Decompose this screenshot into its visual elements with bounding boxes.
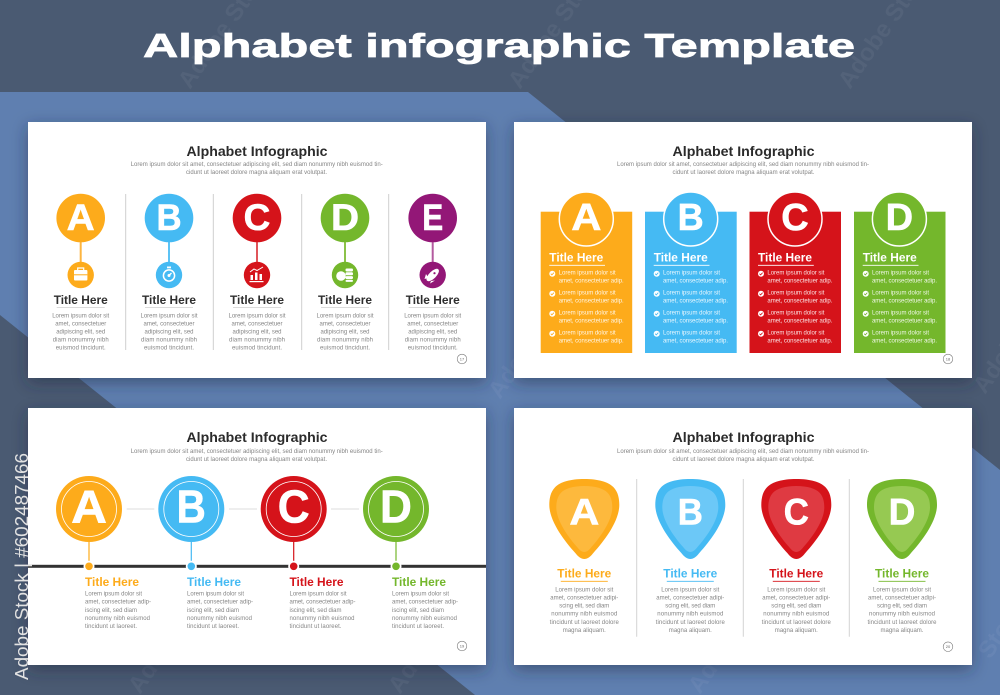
card D: Title Here	[863, 251, 917, 265]
page number 19	[457, 641, 467, 651]
column E: Title Here	[406, 293, 460, 307]
card B: Title Here	[654, 251, 708, 265]
card A: Lorem ipsum dolor sit	[559, 311, 616, 317]
page number 19: 19	[460, 644, 465, 648]
main title: Alphabet infographic Template	[143, 27, 855, 64]
card A: A	[571, 197, 601, 239]
node C: Lorem ipsum dolor sit	[290, 592, 347, 598]
column D: Title Here	[318, 293, 372, 307]
card D	[854, 192, 946, 353]
column D: amet, consectetuer	[320, 322, 370, 328]
column B: diam nonummy nibh	[141, 338, 197, 344]
column E: diam nonummy nibh	[405, 338, 461, 344]
panel intro text: Lorem ipsum dolor sit amet, consectetuer adipiscing elit, sed diam nonummy nibh euismod tin-	[131, 162, 383, 168]
card B: amet, consectetuer adip.	[663, 339, 728, 345]
shield A: magna aliquam.	[563, 628, 606, 634]
column B: Lorem ipsum dolor sit	[140, 314, 198, 320]
shield D: D	[889, 491, 915, 532]
card D: Lorem ipsum dolor sit	[872, 331, 929, 337]
card B: Lorem ipsum dolor sit	[663, 291, 720, 297]
shield B: Title Here	[663, 567, 718, 581]
column C: diam nonummy nibh	[229, 338, 285, 344]
column D: adipiscing elit, sed	[320, 330, 370, 336]
column D: Lorem ipsum dolor sit	[316, 314, 374, 320]
node C: iscing elit, sed diam	[290, 608, 342, 614]
node D: iscing elit, sed diam	[392, 608, 444, 614]
panel intro text	[617, 449, 869, 463]
shield B: scing elit, sed diam	[665, 604, 715, 610]
card D: amet, consectetuer adip.	[872, 339, 937, 345]
node A: iscing elit, sed diam	[85, 608, 137, 614]
node B: B	[177, 482, 206, 533]
panel heading: Alphabet Infographic	[672, 429, 815, 445]
shield A: amet, consectetuer adipi-	[550, 595, 618, 601]
panel intro text	[131, 449, 383, 463]
column A: Lorem ipsum dolor sit	[52, 314, 110, 320]
panel heading: Alphabet Infographic	[186, 143, 328, 159]
column E	[404, 194, 462, 352]
node B: nonummy nibh euismod	[187, 616, 252, 622]
column E: E	[422, 198, 443, 239]
column A: diam nonummy nibh	[53, 338, 109, 344]
card D: Lorem ipsum dolor sit	[872, 311, 929, 317]
panel intro text: Lorem ipsum dolor sit amet, consectetuer adipiscing elit, sed diam nonummy nibh euismod tin-	[617, 449, 869, 455]
card D: D	[886, 197, 913, 239]
node B: tincidunt ut laoreet.	[187, 624, 239, 630]
shield C: nonummy nibh euismod	[763, 612, 829, 618]
panel intro text: cidunt ut laoreet dolore magna aliquam erat volutpat.	[672, 170, 815, 176]
shield B: amet, consectetuer adipi-	[656, 595, 724, 601]
shield C: Lorem ipsum dolor sit	[767, 587, 826, 593]
page number 18: 18	[946, 356, 951, 362]
panel intro text	[131, 162, 383, 176]
panel intro text: Lorem ipsum dolor sit amet, consectetuer adipiscing elit, sed diam nonummy nibh euismod tin-	[131, 449, 383, 455]
shield D: nonummy nibh euismod	[869, 612, 935, 618]
node C: amet, consectetuer adip-	[290, 600, 356, 606]
card D: amet, consectetuer adip.	[872, 299, 937, 305]
shield C: scing elit, sed diam	[771, 604, 821, 610]
shield B: B	[678, 491, 703, 533]
panel: guitar pick shields	[514, 408, 972, 665]
shield A	[549, 479, 619, 634]
node D: Title Here	[392, 575, 446, 589]
card D: Lorem ipsum dolor sit	[872, 271, 929, 277]
shield A: Title Here	[557, 567, 612, 581]
card A: Lorem ipsum dolor sit	[559, 271, 616, 277]
node D	[363, 476, 458, 630]
column C: amet, consectetuer	[232, 322, 282, 328]
shield D: Lorem ipsum dolor sit	[873, 587, 931, 593]
shield A: tincidunt ut laoreet dolore	[550, 620, 619, 626]
node C: tincidunt ut laoreet.	[290, 624, 342, 630]
column C: euismod tincidunt.	[232, 346, 282, 352]
node D: nonummy nibh euismod	[392, 616, 457, 622]
column E: euismod tincidunt.	[408, 346, 458, 352]
panel intro text: Lorem ipsum dolor sit amet, consectetuer adipiscing elit, sed diam nonummy nibh euismod tin-	[617, 162, 869, 168]
panel intro text: cidunt ut laoreet dolore magna aliquam erat volutpat.	[186, 457, 327, 463]
column A: adipiscing elit, sed	[56, 330, 105, 336]
shield D: scing elit, sed diam	[877, 604, 927, 610]
card A: Title Here	[549, 251, 604, 265]
node A	[56, 476, 151, 630]
node D: Lorem ipsum dolor sit	[392, 592, 449, 598]
panel intro text: cidunt ut laoreet dolore magna aliquam erat volutpat.	[672, 457, 815, 463]
card C: Lorem ipsum dolor sit	[767, 311, 825, 317]
card A: amet, consectetuer adip.	[559, 279, 624, 285]
icon: bar chart	[244, 262, 270, 288]
column C: Lorem ipsum dolor sit	[228, 314, 286, 320]
icon: rocket	[420, 262, 446, 288]
card A: amet, consectetuer adip.	[559, 339, 624, 345]
shield C: magna aliquam.	[775, 628, 818, 634]
node D: amet, consectetuer adip-	[392, 600, 458, 606]
panel heading: Alphabet Infographic	[672, 143, 815, 159]
column D: D	[331, 198, 359, 239]
card C	[750, 192, 841, 353]
column A: amet, consectetuer	[55, 322, 106, 328]
column B: adipiscing elit, sed	[144, 330, 194, 336]
card A	[541, 192, 632, 353]
node C: nonummy nibh euismod	[290, 616, 354, 622]
node A: A	[71, 482, 107, 533]
card B: Lorem ipsum dolor sit	[663, 331, 720, 337]
column D: diam nonummy nibh	[317, 338, 373, 344]
node B: Lorem ipsum dolor sit	[187, 592, 244, 598]
panel heading: Alphabet Infographic	[186, 429, 328, 445]
page number 18	[943, 354, 953, 364]
node A: Title Here	[85, 575, 139, 589]
shield D: tincidunt ut laoreet dolore	[868, 620, 937, 626]
card C: Lorem ipsum dolor sit	[767, 271, 825, 277]
column B: euismod tincidunt.	[144, 346, 194, 352]
page number 17: 17	[460, 356, 465, 362]
node A: nonummy nibh euismod	[85, 616, 150, 622]
shield D: Title Here	[875, 567, 929, 581]
shield C: amet, consectetuer adipi-	[762, 595, 830, 601]
card C: Lorem ipsum dolor sit	[767, 331, 825, 337]
card C: amet, consectetuer adip.	[767, 339, 833, 345]
card A: Lorem ipsum dolor sit	[559, 291, 616, 297]
column A: Title Here	[54, 293, 108, 307]
panel intro text: cidunt ut laoreet dolore magna aliquam erat volutpat.	[186, 170, 327, 176]
node A: amet, consectetuer adip-	[85, 600, 151, 606]
card A: amet, consectetuer adip.	[559, 299, 624, 305]
column C: adipiscing elit, sed	[232, 330, 282, 336]
shield A: Lorem ipsum dolor sit	[555, 587, 614, 593]
card D: amet, consectetuer adip.	[872, 279, 937, 285]
timeline bar	[28, 565, 486, 568]
panel intro text	[617, 162, 869, 176]
panel: four coloured cards	[514, 122, 972, 378]
card C: amet, consectetuer adip.	[767, 279, 833, 285]
node B: amet, consectetuer adip-	[187, 600, 253, 606]
card C: C	[781, 197, 809, 239]
shield B: magna aliquam.	[669, 628, 712, 634]
stock credit: Adobe Stock | #602487466	[12, 453, 32, 680]
node A: Lorem ipsum dolor sit	[85, 592, 142, 598]
column B: amet, consectetuer	[144, 322, 194, 328]
shield B: nonummy nibh euismod	[657, 612, 723, 618]
column B	[140, 194, 198, 352]
node D: D	[380, 480, 412, 533]
faint watermark: Adobe	[483, 327, 548, 403]
panel: five circles with icons	[28, 122, 486, 378]
shield C	[761, 479, 831, 634]
node B: Title Here	[187, 575, 241, 589]
card C: amet, consectetuer adip.	[767, 319, 833, 325]
card D: Lorem ipsum dolor sit	[872, 291, 929, 297]
node B: iscing elit, sed diam	[187, 608, 239, 614]
card A: amet, consectetuer adip.	[559, 319, 624, 325]
icon: coins	[332, 262, 358, 288]
node D: tincidunt ut laoreet.	[392, 624, 444, 630]
column E: adipiscing elit, sed	[408, 330, 457, 336]
card B	[645, 192, 737, 353]
column B: Title Here	[142, 293, 196, 307]
column A	[52, 194, 110, 352]
card B: B	[678, 195, 704, 238]
node C: Title Here	[290, 575, 344, 589]
shield A: scing elit, sed diam	[559, 604, 609, 610]
shield A: nonummy nibh euismod	[551, 612, 617, 618]
icon: briefcase	[68, 262, 94, 288]
node C	[261, 476, 356, 630]
shield A: A	[569, 491, 599, 533]
page number 20	[943, 642, 953, 652]
column E: Lorem ipsum dolor sit	[404, 314, 462, 320]
column D	[316, 194, 374, 352]
page number 20: 20	[946, 644, 951, 649]
card D: amet, consectetuer adip.	[872, 319, 937, 325]
shield C: tincidunt ut laoreet dolore	[762, 620, 831, 626]
page number 17	[457, 354, 467, 364]
card B: amet, consectetuer adip.	[663, 279, 728, 285]
shield C: Title Here	[769, 567, 824, 581]
icon: stopwatch	[156, 262, 182, 288]
card B: Lorem ipsum dolor sit	[663, 311, 720, 317]
card C: amet, consectetuer adip.	[767, 299, 833, 305]
card B: amet, consectetuer adip.	[663, 299, 728, 305]
column C	[228, 194, 286, 352]
card C: Title Here	[758, 251, 812, 265]
shield B: tincidunt ut laoreet dolore	[656, 620, 725, 626]
shield D: magna aliquam.	[880, 628, 924, 634]
shield D	[867, 479, 937, 634]
node C: C	[278, 480, 310, 533]
column C: Title Here	[230, 293, 284, 307]
shield B	[655, 479, 725, 634]
card A: Lorem ipsum dolor sit	[559, 331, 616, 337]
card B: amet, consectetuer adip.	[663, 319, 728, 325]
node B	[158, 476, 253, 630]
shield B: Lorem ipsum dolor sit	[661, 587, 720, 593]
column A: A	[67, 198, 95, 239]
column E: amet, consectetuer	[407, 322, 458, 328]
column A: euismod tincidunt.	[56, 346, 106, 352]
node A: tincidunt ut laoreet.	[85, 624, 137, 630]
panel: timeline	[28, 408, 486, 665]
card C: Lorem ipsum dolor sit	[767, 291, 825, 297]
column D: euismod tincidunt.	[320, 346, 370, 352]
shield D: amet, consectetuer adipi-	[868, 595, 936, 601]
column C: C	[244, 197, 270, 238]
card B: Lorem ipsum dolor sit	[663, 271, 720, 277]
column B: B	[156, 197, 182, 238]
shield C: C	[784, 491, 809, 533]
